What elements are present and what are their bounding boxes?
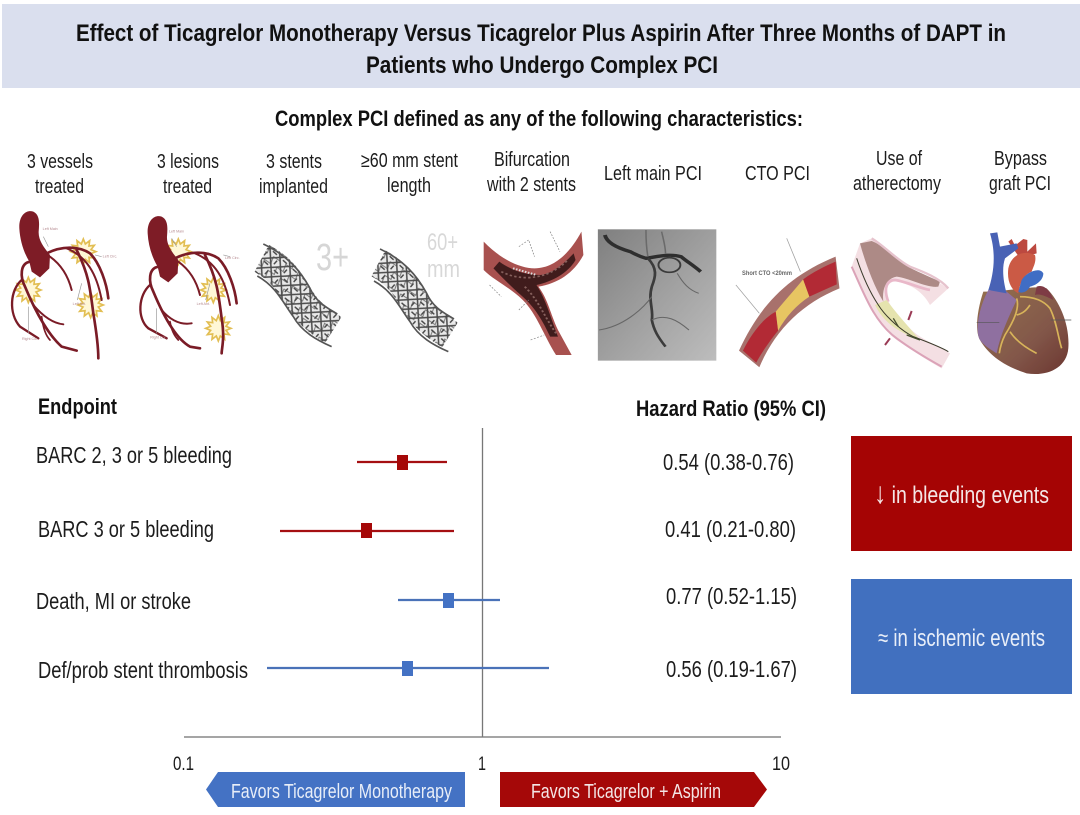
title banner: Patients who Undergo Complex PCI bbox=[366, 52, 718, 79]
endpoint labels bbox=[36, 442, 248, 683]
axis tick labels: 0.1 bbox=[173, 754, 194, 775]
endpoint labels: BARC 2, 3 or 5 bleeding bbox=[36, 442, 232, 468]
characteristic labels row: atherectomy bbox=[853, 173, 941, 195]
endpoint labels: Death, MI or stroke bbox=[36, 588, 191, 614]
icon: coronary tree, 3 lesions treated: Left Ant. bbox=[197, 302, 210, 306]
characteristic labels row: treated bbox=[35, 176, 84, 198]
characteristic labels row: graft PCI bbox=[989, 173, 1051, 195]
icon: coronary tree, 3 vessels treated bbox=[12, 211, 117, 358]
label: Short CTO: Short CTO <20mm bbox=[742, 270, 792, 277]
icon: bifurcation with 2 stents bbox=[484, 232, 583, 355]
row: BARC 3 or 5 bleeding bbox=[280, 523, 454, 538]
icon: stent, 60+ mm length bbox=[374, 249, 454, 352]
arrow: favors ticagrelor monotherapy bbox=[206, 772, 465, 807]
callout: ischemic events bbox=[851, 579, 1072, 694]
hazard ratio values bbox=[663, 449, 797, 682]
icon: coronary tree, 3 lesions treated: Right Cor. bbox=[150, 335, 167, 339]
icon: atherectomy vessel cross-section bbox=[852, 238, 950, 368]
arrow: favors ticagrelor plus aspirin bbox=[500, 772, 767, 807]
label: 3+: 3+ bbox=[316, 237, 349, 279]
arrow: favors ticagrelor monotherapy: Favors Ticagrelor Monotherapy bbox=[231, 781, 452, 803]
characteristic labels row: Bypass bbox=[994, 148, 1047, 170]
heading: Endpoint: Endpoint bbox=[38, 394, 118, 419]
arrow: favors ticagrelor plus aspirin: Favors Ticagrelor + Aspirin bbox=[531, 781, 721, 803]
label: 60+ mm: 60+ bbox=[427, 229, 458, 256]
endpoint labels: Def/prob stent thrombosis bbox=[38, 657, 248, 683]
characteristic labels row: Use of bbox=[876, 148, 922, 170]
characteristic labels row: 3 stents bbox=[266, 151, 322, 173]
hazard ratio values: 0.77 (0.52-1.15) bbox=[666, 583, 797, 609]
icon: coronary tree, 3 lesions treated bbox=[140, 216, 240, 353]
icon: heart with bypass grafts bbox=[977, 232, 1071, 374]
icon: stent, 3 stents implanted bbox=[257, 244, 337, 347]
hazard ratio values: 0.54 (0.38-0.76) bbox=[663, 449, 794, 475]
characteristic labels row: Left main PCI bbox=[604, 163, 702, 185]
row: BARC 2, 3 or 5 bleeding bbox=[357, 455, 447, 470]
characteristic labels row: length bbox=[387, 175, 431, 197]
characteristic labels row: treated bbox=[163, 176, 212, 198]
title banner bbox=[2, 4, 1080, 88]
characteristic labels row: Bifurcation bbox=[494, 149, 570, 171]
label: 60+ mm: mm bbox=[427, 256, 460, 283]
icon: chronic total occlusion vessel bbox=[736, 238, 839, 367]
characteristic labels row: 3 lesions bbox=[157, 151, 219, 173]
characteristic labels row: with 2 stents bbox=[486, 174, 576, 196]
forest plot bbox=[184, 428, 781, 737]
row: Death, MI or stroke bbox=[398, 593, 500, 608]
row: Def/prob stent thrombosis bbox=[267, 661, 549, 676]
icon: left main angiogram bbox=[598, 229, 716, 361]
label: 60+ mm bbox=[427, 229, 460, 283]
axis tick labels: 10 bbox=[772, 754, 790, 775]
icon: coronary tree, 3 lesions treated: Left Circ. bbox=[225, 256, 240, 260]
axis tick labels: 1 bbox=[478, 754, 486, 775]
hazard ratio values: 0.56 (0.19-1.67) bbox=[666, 656, 797, 682]
callout: bleeding events bbox=[851, 436, 1072, 551]
heading: Hazard Ratio: Hazard Ratio (95% CI) bbox=[636, 396, 826, 421]
characteristic labels row: CTO PCI bbox=[745, 163, 810, 185]
characteristic labels row: implanted bbox=[259, 176, 328, 198]
characteristic labels row: ≥60 mm stent bbox=[361, 150, 458, 172]
icon: coronary tree, 3 vessels treated: Left Main bbox=[43, 227, 58, 231]
icon: coronary tree, 3 lesions treated: Left Main bbox=[169, 229, 184, 233]
axis tick labels bbox=[173, 754, 790, 775]
hazard ratio values: 0.41 (0.21-0.80) bbox=[665, 516, 796, 542]
icon: coronary tree, 3 vessels treated: Right Cor. bbox=[22, 337, 38, 341]
subtitle: complex PCI definition: Complex PCI defined as any of the following characteristics: bbox=[275, 106, 803, 131]
icon: coronary tree, 3 vessels treated: Left Ant. bbox=[73, 302, 86, 306]
icon: coronary tree, 3 vessels treated: Left Circ. bbox=[103, 254, 117, 258]
characteristic labels row bbox=[27, 148, 1051, 198]
callout: bleeding events: ↓ in bleeding events bbox=[874, 477, 1049, 510]
characteristic labels row: 3 vessels bbox=[27, 151, 93, 173]
endpoint labels: BARC 3 or 5 bleeding bbox=[38, 516, 214, 542]
